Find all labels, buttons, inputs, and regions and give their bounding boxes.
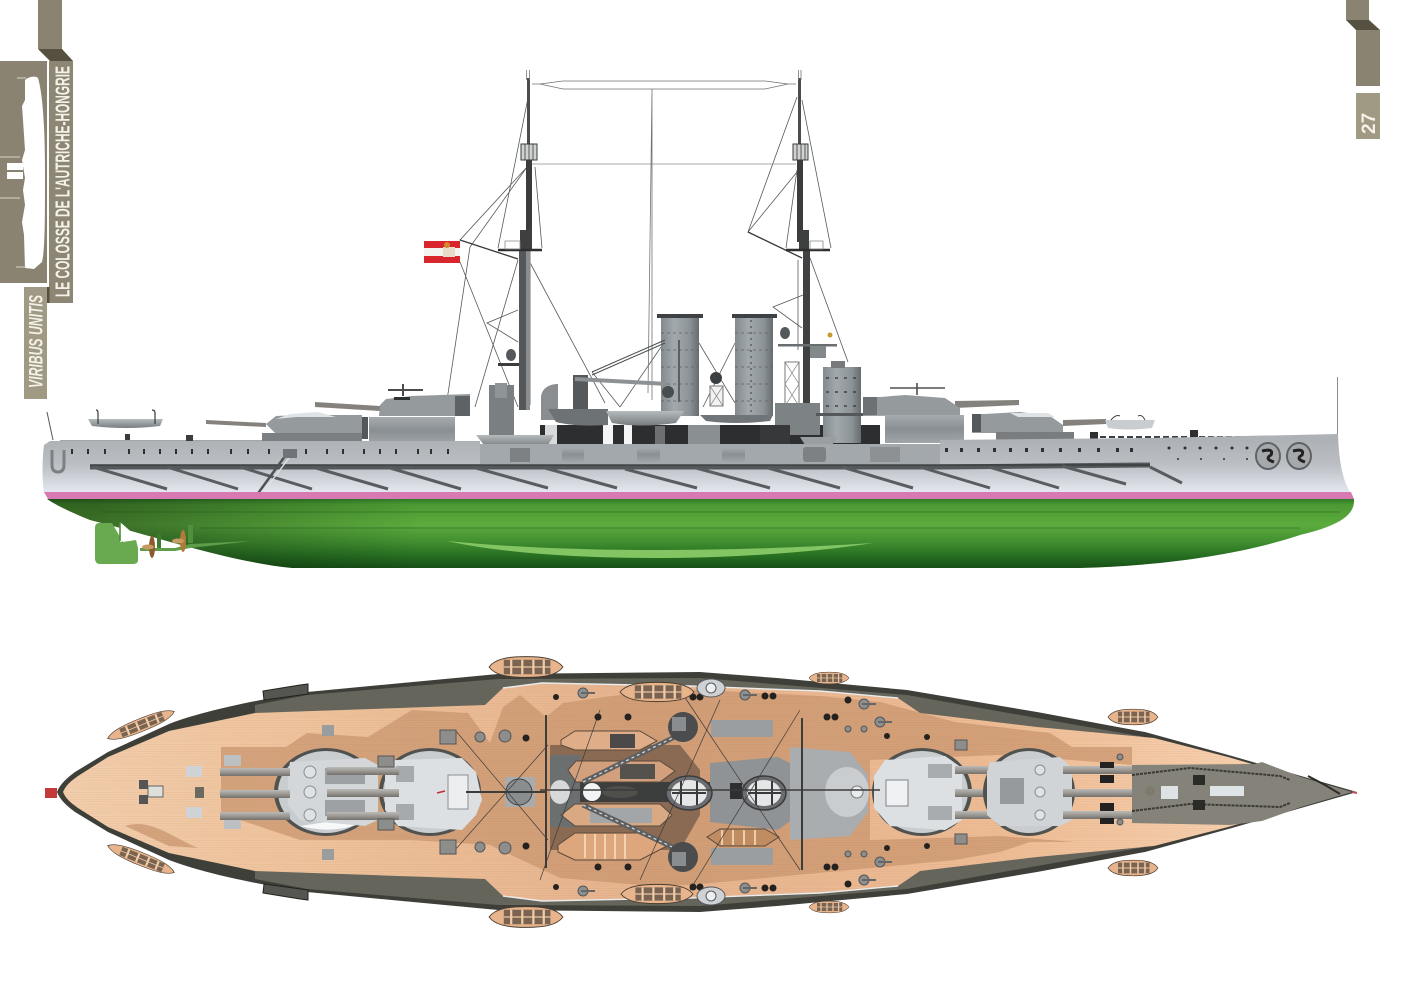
gangway ledge (90, 465, 1150, 467)
cranes (583, 712, 698, 872)
stern fittings (45, 725, 334, 860)
midships superstructure (489, 361, 880, 447)
lifeboats, side view (88, 409, 1155, 447)
left page tab (0, 0, 74, 399)
rudder (95, 522, 138, 564)
propellers and shafts (140, 525, 252, 558)
deck bollards and ventilators (522, 692, 930, 892)
boats stowed on deck (558, 720, 779, 865)
aft turrets (206, 384, 470, 444)
wooden main deck (63, 682, 1252, 902)
side elevation of the battleship (42, 70, 1354, 568)
side deck, port and starboard (255, 678, 1228, 906)
central casemate band (480, 444, 940, 464)
grey hull side (42, 434, 1351, 503)
fore turrets (863, 383, 1106, 443)
right page tab (1346, 0, 1380, 139)
deck shadows (125, 690, 1132, 885)
midships crane and searchlights (498, 327, 837, 411)
anchor chains (1132, 768, 1290, 811)
anti-torpedo net booms (93, 466, 1182, 489)
boot-topping stripe (44, 492, 1354, 499)
green underwater hull (47, 499, 1354, 568)
lifeboats outside the hull (105, 657, 1158, 927)
barrels (327, 767, 399, 820)
after turret A (220, 748, 378, 836)
barrels (955, 766, 1026, 819)
accommodation ladder (251, 449, 297, 503)
funnels (657, 314, 777, 416)
grey forecastle plating (1132, 762, 1352, 825)
amidships gun sponsons (697, 679, 725, 905)
ship name strip (24, 287, 50, 399)
side drums (510, 447, 900, 462)
page number: 27 (1359, 113, 1380, 134)
flag (424, 241, 460, 263)
barrels (220, 768, 290, 820)
fore turret C (872, 748, 1026, 836)
deck plan of the battleship (45, 657, 1360, 927)
chapter title strip (49, 61, 74, 303)
bilge keel (447, 541, 873, 558)
central superstructure (505, 745, 869, 850)
masts seen from above (455, 690, 880, 890)
bow fittings (1145, 775, 1357, 810)
hull outline from above (57, 672, 1357, 912)
ship silhouette panel (0, 61, 47, 283)
barrels (1063, 766, 1132, 819)
gangway platforms (263, 684, 308, 900)
after turret B (327, 748, 482, 836)
fore turret D (983, 748, 1132, 836)
aft mast (498, 70, 542, 410)
ship name strip: VIRIBUS UNITIS (26, 295, 48, 388)
funnel tops (666, 776, 786, 810)
deck fittings (47, 377, 1338, 441)
rigging and wires (446, 81, 848, 407)
hawse pipes and anchors (1256, 443, 1311, 469)
fore mast (786, 70, 830, 410)
stern fittings (52, 450, 64, 472)
portholes (71, 446, 1248, 460)
